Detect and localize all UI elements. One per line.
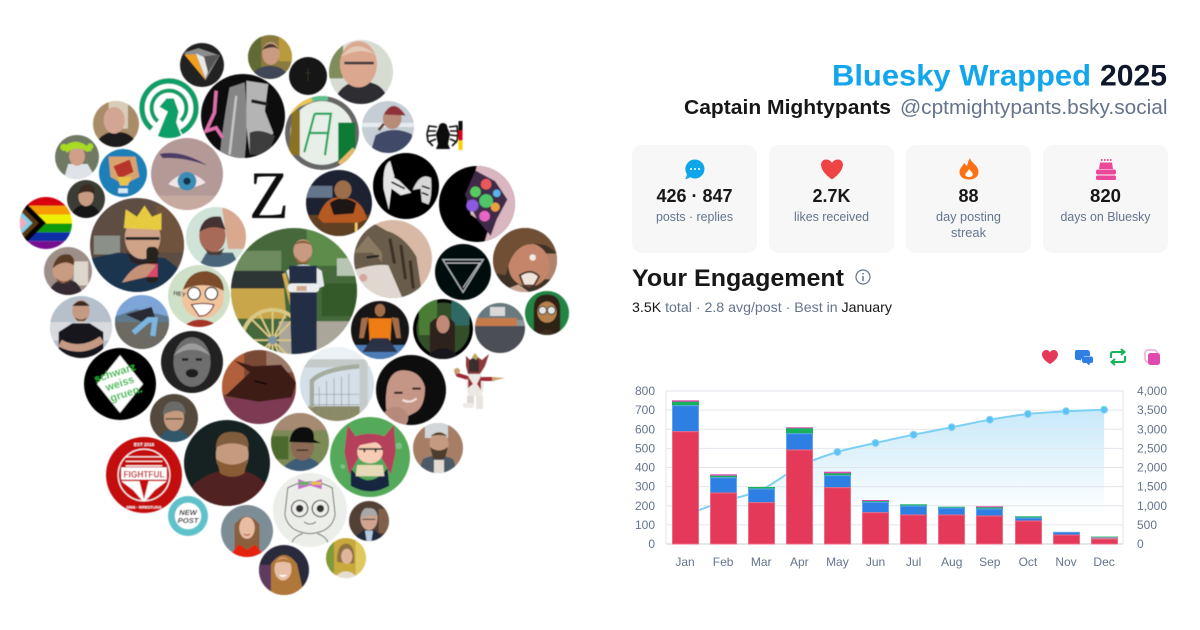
avatar: bald man — [93, 101, 139, 147]
icon: birthday cake — [1096, 159, 1116, 180]
month labels: May — [826, 555, 849, 569]
avatar: sleeping dog — [222, 350, 296, 424]
card: posting streak: streak — [951, 225, 986, 240]
card: posts and replies: 426 · 847 — [656, 186, 732, 206]
card: posting streak: day posting — [936, 209, 1001, 224]
avatar: Fightful logo: MMA · WRESTLING — [126, 505, 162, 509]
stacked bars — [672, 400, 1118, 544]
avatar: redhead woman — [259, 545, 309, 595]
user name and handle — [684, 97, 1168, 119]
avatar: smiling woman — [376, 355, 446, 429]
bar: Jul — [900, 504, 927, 544]
left axis labels: 400 — [635, 460, 655, 474]
month labels: Aug — [941, 555, 962, 569]
avatar: young man in dark sweater — [67, 180, 105, 218]
avatar: stylised art portrait — [186, 207, 246, 267]
left axis labels: 300 — [635, 480, 655, 494]
bar: Jun — [862, 500, 889, 544]
avatar: tabby cat — [354, 220, 432, 298]
icon: repost arrows — [1111, 349, 1125, 365]
bar: Dec — [1091, 536, 1118, 544]
bar: Mar — [748, 487, 775, 544]
avatar: schwarz weiss gruen logo: gruen. — [109, 383, 144, 405]
avatar: inverted triangle logo — [435, 244, 491, 300]
user name and handle: Captain Mightypants — [684, 97, 891, 119]
bar: Jan — [672, 400, 699, 544]
avatar: man with crossed arms — [50, 296, 112, 358]
icon: info — [856, 270, 870, 284]
card: days on Bluesky: days on Bluesky — [1060, 209, 1151, 224]
avatar: green chess signal logo — [138, 77, 200, 139]
card: posting streak: 88 — [958, 186, 978, 206]
card: days on Bluesky: 820 — [1090, 186, 1121, 206]
engagement summary: 3.5K total · 2.8 avg/post · Best in January — [632, 299, 892, 315]
right axis labels: 2,000 — [1137, 460, 1167, 474]
right axis labels — [1137, 384, 1167, 551]
left axis labels: 600 — [635, 422, 655, 436]
avatar: cartoon person with glasses — [525, 291, 569, 335]
right axis labels: 1,000 — [1137, 499, 1167, 513]
month labels: Jun — [866, 555, 885, 569]
month labels: Apr — [790, 555, 809, 569]
month labels: Dec — [1093, 555, 1115, 569]
avatar: schwarz weiss gruen logo: schwarz — [93, 361, 137, 386]
right axis labels: 3,500 — [1137, 403, 1167, 417]
bar: May — [824, 472, 851, 544]
avatar: wrestler in orange shirt — [351, 301, 409, 359]
bar: Apr — [786, 427, 813, 544]
avatar: main profile photo with carriage — [231, 228, 357, 370]
cumulative area — [685, 410, 1104, 544]
icon: likes heart — [1042, 350, 1058, 364]
avatar: grey textured face — [161, 331, 223, 393]
avatar: man with paper crown — [90, 198, 184, 292]
avatar: man outdoors — [247, 34, 293, 80]
cumulative line — [685, 406, 1108, 515]
avatar: Z logo: Z — [249, 157, 289, 233]
icon: flame — [960, 158, 978, 180]
avatar: woman in forest — [413, 299, 473, 359]
avatar: night bar — [306, 170, 372, 236]
avatar: New Post badge: NEW — [179, 508, 198, 517]
avatar: sneakers drawing — [373, 153, 439, 219]
right axis labels: 4,000 — [1137, 384, 1167, 398]
right axis labels: 3,000 — [1137, 422, 1167, 436]
icon: replies bubbles — [1075, 350, 1093, 366]
title: Bluesky Wrapped 2025: 2025 — [1100, 60, 1167, 92]
icon: chat bubble — [685, 159, 704, 179]
left axis labels: 500 — [635, 441, 655, 455]
left axis labels: 700 — [635, 403, 655, 417]
avatar: pipe smoking man — [362, 101, 414, 153]
avatar: football goal — [300, 347, 374, 421]
icon: quotes squares — [1145, 350, 1160, 365]
left axis labels — [635, 384, 655, 551]
avatar: wrestling figurine — [454, 353, 505, 409]
right axis labels: 0 — [1137, 537, 1144, 551]
avatar: New Post badge — [168, 496, 208, 536]
left axis labels: 200 — [635, 499, 655, 513]
avatar: blonde woman on yellow — [326, 538, 366, 578]
avatar: colourful tree on black — [439, 166, 515, 242]
right axis labels: 500 — [1137, 518, 1157, 532]
avatar: man in black cap — [271, 413, 329, 471]
avatar: penguin logo — [180, 43, 224, 87]
avatar: cartoon man with glasses — [168, 265, 230, 327]
avatar: black and white long hair man — [201, 74, 285, 158]
month labels — [675, 555, 1115, 569]
month labels: Oct — [1019, 555, 1038, 569]
month labels: Jul — [906, 555, 921, 569]
month labels: Mar — [751, 555, 772, 569]
heading: Your Engagement: Your Engagement — [632, 265, 844, 292]
chart legend — [1042, 349, 1160, 366]
avatar: German federal eagle — [427, 121, 462, 150]
avatar: New Post badge: POST — [178, 516, 200, 525]
card: posting streak — [906, 145, 1031, 253]
bar: Sep — [976, 506, 1003, 544]
avatar: older man with glasses — [329, 40, 393, 104]
avatar: screaming man — [493, 228, 557, 292]
avatar: wrestling poster — [99, 149, 147, 197]
avatar: ring with sign — [285, 96, 359, 170]
avatar: Fightful logo: EST 2016 — [134, 442, 155, 447]
avatar: bearded man with glasses — [413, 423, 463, 473]
engagement chart — [635, 384, 1167, 569]
avatar: man in suit — [349, 501, 389, 541]
avatar: cartoon man with glasses: HEY — [173, 290, 187, 299]
avatar: progress pride flag — [20, 197, 72, 249]
month labels: Jan — [675, 555, 695, 569]
user name and handle: @cptmightypants.bsky.social — [900, 97, 1168, 119]
avatar: man with long hair — [44, 247, 92, 295]
left axis labels: 100 — [635, 518, 655, 532]
icon: heart — [821, 160, 843, 180]
avatar: street with orange banner — [475, 303, 525, 353]
bar: Feb — [710, 474, 737, 544]
card: likes received: 2.7K — [812, 186, 850, 206]
avatar: Fightful logo: FIGHTFUL — [123, 469, 165, 479]
card: likes received: likes received — [794, 209, 869, 224]
card: posts and replies — [632, 145, 757, 253]
card: likes received — [769, 145, 894, 253]
left axis labels: 800 — [635, 384, 655, 398]
title: Bluesky Wrapped 2025: Bluesky Wrapped — [832, 60, 1091, 92]
avatar: schwarz weiss gruen logo — [84, 348, 156, 420]
avatar: man with grey hair and glasses — [150, 394, 198, 442]
month labels: Nov — [1055, 555, 1077, 569]
avatar: Fightful logo — [106, 437, 182, 513]
panel: stat cards — [632, 145, 1168, 253]
avatar: man with red sweater — [184, 420, 270, 506]
right axis labels: 2,500 — [1137, 441, 1167, 455]
bar: Oct — [1015, 516, 1042, 544]
avatar: blonde woman in red — [221, 505, 273, 557]
avatar: blue eye closeup — [151, 138, 223, 210]
avatar cloud — [20, 35, 569, 595]
right axis labels: 1,500 — [1137, 480, 1167, 494]
avatar: black cross — [289, 57, 327, 95]
bar: Aug — [938, 507, 965, 544]
avatar: cartoon cat girl on green — [330, 417, 410, 497]
avatar: schwarz weiss gruen logo: weiss — [103, 374, 136, 394]
avatar: line sketch with rainbow bow — [273, 473, 347, 547]
month labels: Feb — [713, 555, 734, 569]
avatar: green alien hat — [55, 135, 99, 179]
left axis labels: 0 — [648, 537, 655, 551]
avatar: kneeling person on road — [115, 295, 169, 349]
card: posts and replies: posts · replies — [656, 209, 733, 224]
month labels: Sep — [979, 555, 1001, 569]
card: days on Bluesky — [1043, 145, 1168, 253]
bar: Nov — [1054, 532, 1080, 544]
